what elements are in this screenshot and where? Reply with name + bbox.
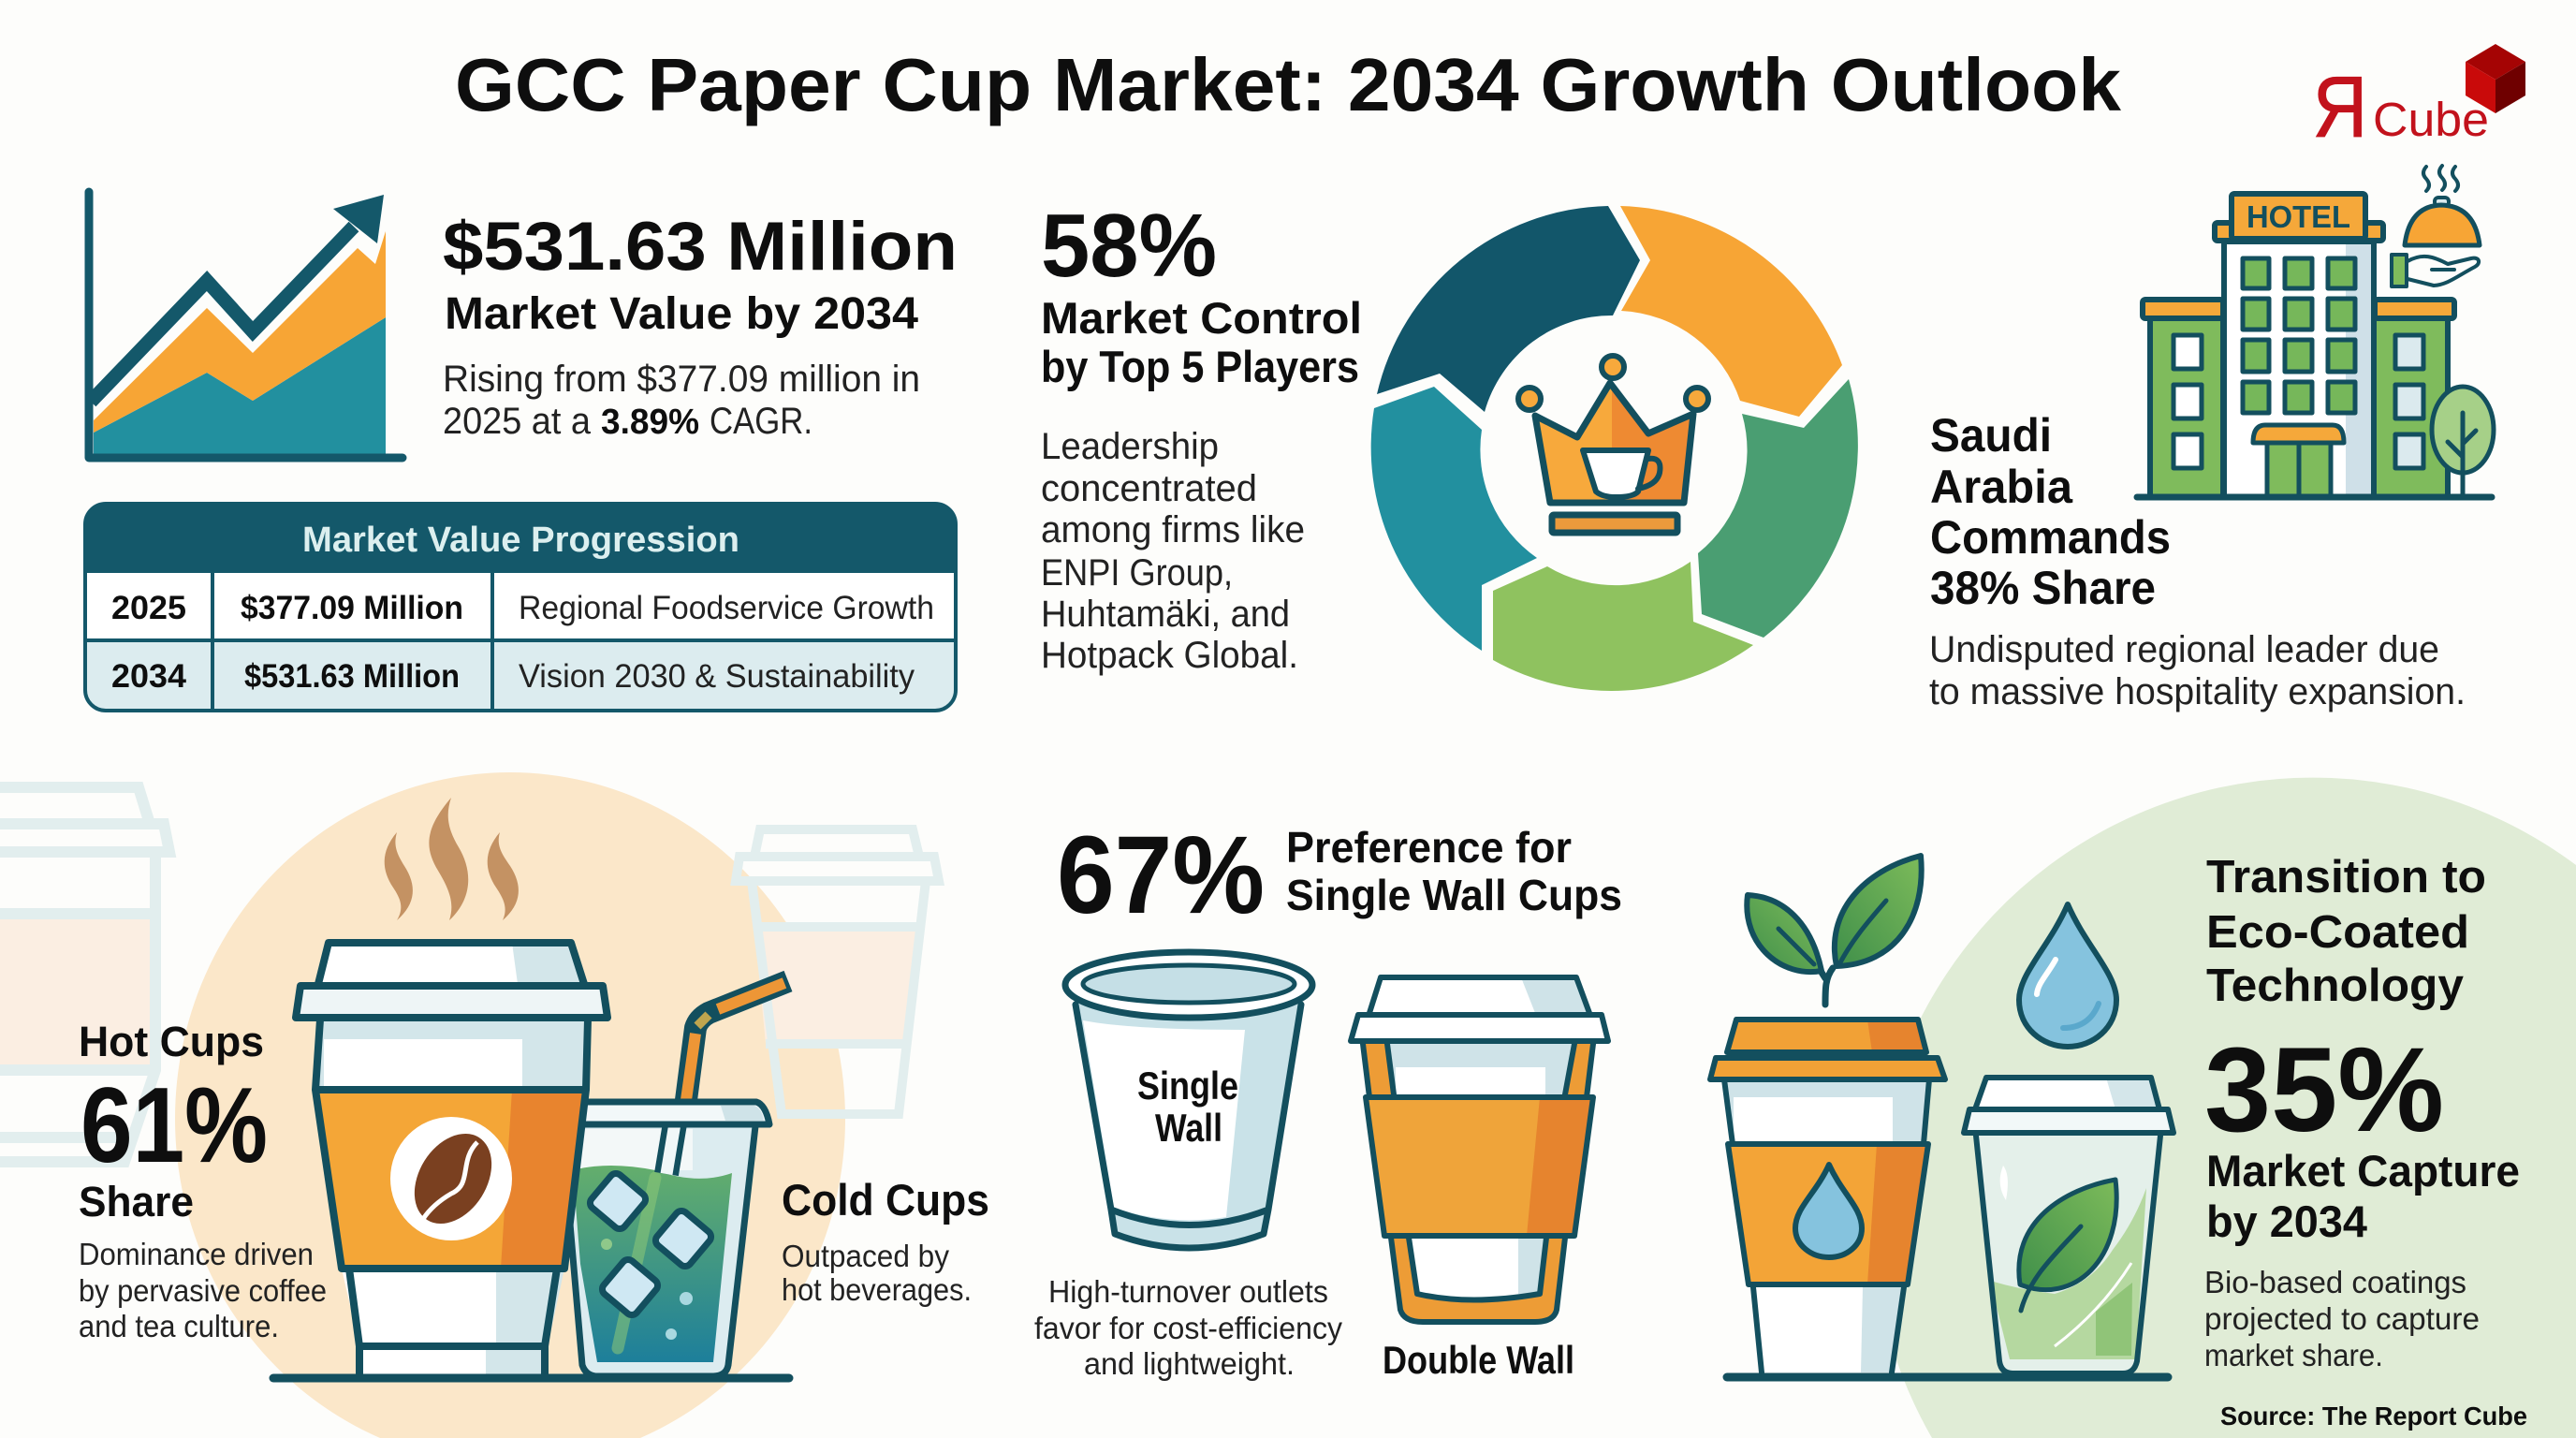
description: among firms like <box>1041 509 1305 550</box>
heading: by Top 5 Players <box>1041 342 1359 391</box>
table: market value progression: Regional Foodservice Growth <box>519 590 934 626</box>
background: faded cup left <box>0 787 169 1162</box>
icon: steam <box>385 798 519 920</box>
icon: serving cloche and hand <box>2392 166 2480 286</box>
background: green circle <box>1873 778 2576 1438</box>
heading: 38% Share <box>1930 562 2156 614</box>
double wall label: Double Wall <box>1383 1338 1574 1382</box>
panel: eco-coated technology <box>1710 778 2576 1438</box>
market capture label <box>2206 1146 2520 1246</box>
description: projected to capture <box>2204 1301 2480 1336</box>
ground line <box>273 1374 789 1382</box>
description: ENPI Group, <box>1041 552 1233 594</box>
description: 2025 at a <box>443 401 592 442</box>
heading <box>1041 293 1362 391</box>
description: Leadership <box>1041 426 1219 467</box>
icon: water drop <box>2019 904 2116 1047</box>
icon: single wall cup <box>1065 952 1312 1248</box>
icon: eco hot cup <box>1710 1020 1945 1372</box>
description <box>443 359 920 442</box>
heading: Arabia <box>1930 461 2073 513</box>
description <box>1034 1274 1342 1381</box>
panel: market control <box>1041 196 1858 691</box>
hot cups description: and tea culture. <box>79 1309 279 1343</box>
heading: Eco-Coated <box>2206 907 2469 958</box>
description: High-turnover outlets <box>1048 1274 1328 1309</box>
description: and lightweight. <box>1084 1346 1295 1381</box>
sub heading: Market Value by 2034 <box>445 289 918 339</box>
heading: Saudi <box>1930 409 2052 462</box>
67% figure: 67% <box>1057 814 1265 937</box>
heading <box>2206 852 2486 1011</box>
heading: Market Control <box>1041 293 1362 343</box>
panel: Saudi Arabia <box>1929 166 2494 712</box>
35% figure: 35% <box>2204 1023 2444 1157</box>
description: Hotpack Global. <box>1041 635 1298 676</box>
heading <box>1286 823 1622 919</box>
heading: Single Wall Cups <box>1286 871 1622 919</box>
headline value: $531.63 Million <box>443 209 958 285</box>
58% figure: 58% <box>1041 196 1217 296</box>
cold cups label: Cold Cups <box>782 1175 989 1225</box>
panel: single wall preference <box>1034 814 1622 1382</box>
icon: crown with cup <box>1518 356 1708 533</box>
share label: Share <box>79 1178 194 1225</box>
market capture label: by 2034 <box>2206 1196 2367 1246</box>
table: market value progression: $377.09 Million <box>241 590 463 626</box>
hot cups description <box>79 1237 327 1343</box>
panel: hot and cold cups <box>0 772 989 1438</box>
table: market value progression: Market Value Progression <box>302 521 739 560</box>
logo: Report Cube: Я <box>2313 60 2367 155</box>
hot cups label: Hot Cups <box>79 1018 264 1065</box>
description: to massive hospitality expansion. <box>1929 671 2466 712</box>
ground line <box>1727 1372 2168 1382</box>
hot cups description: Dominance driven <box>79 1237 314 1271</box>
description <box>1929 629 2466 712</box>
table: market value progression: Vision 2030 & Sustainability <box>519 658 915 695</box>
title: GCC Paper Cup Market: 2034 Growth Outlook <box>455 43 2122 126</box>
icon: hot cup <box>296 943 607 1376</box>
cold cups description: Outpaced by <box>782 1239 949 1273</box>
icon: single wall cup: Single <box>1137 1064 1238 1108</box>
source note: Source: The Report Cube <box>2220 1401 2527 1431</box>
cold cups description <box>782 1239 972 1307</box>
icon: hotel <box>2137 194 2494 497</box>
heading: Commands <box>1930 511 2171 564</box>
heading: Transition to <box>2206 852 2486 902</box>
table: market value progression <box>85 504 956 711</box>
icon: sprout <box>1747 856 1922 1005</box>
description: CAGR. <box>710 401 812 442</box>
donut chart of five segments <box>1371 206 1858 691</box>
area chart icon with arrow <box>89 192 402 458</box>
table: market value progression: 2025 <box>111 590 186 626</box>
icon: eco cold cup with leaf <box>1964 1078 2174 1373</box>
table: market value progression: $531.63 Million <box>244 658 460 695</box>
icon: cold cup with straw <box>562 981 788 1376</box>
description: Huhtamäki, and <box>1041 594 1290 635</box>
description: market share. <box>2204 1338 2383 1372</box>
icon: double wall cup <box>1351 977 1608 1322</box>
cold cups description: hot beverages. <box>782 1272 972 1307</box>
logo: Report Cube <box>2313 44 2525 155</box>
icon: hotel: HOTEL <box>2247 199 2350 234</box>
description: Bio-based coatings <box>2204 1265 2466 1299</box>
description <box>2204 1265 2480 1372</box>
panel: market value <box>85 192 958 711</box>
description: Undisputed regional leader due <box>1929 629 2439 670</box>
61% figure: 61% <box>80 1066 268 1185</box>
description: concentrated <box>1041 468 1257 509</box>
heading <box>1930 409 2171 614</box>
hot cups description: by pervasive coffee <box>79 1273 327 1308</box>
heading: Technology <box>2206 961 2464 1011</box>
table: market value progression: 2034 <box>111 658 187 695</box>
heading: Preference for <box>1286 823 1572 872</box>
description: Rising from $377.09 million in <box>443 359 920 400</box>
background: faded cup right <box>736 829 939 1114</box>
description: favor for cost-efficiency <box>1034 1311 1342 1345</box>
description: 3.89% <box>601 403 699 442</box>
market capture label: Market Capture <box>2206 1146 2520 1196</box>
icon: single wall cup: Wall <box>1155 1106 1222 1150</box>
logo: Report Cube: Cube <box>2373 93 2489 146</box>
description <box>1041 426 1305 676</box>
background: peach circle <box>175 772 845 1438</box>
